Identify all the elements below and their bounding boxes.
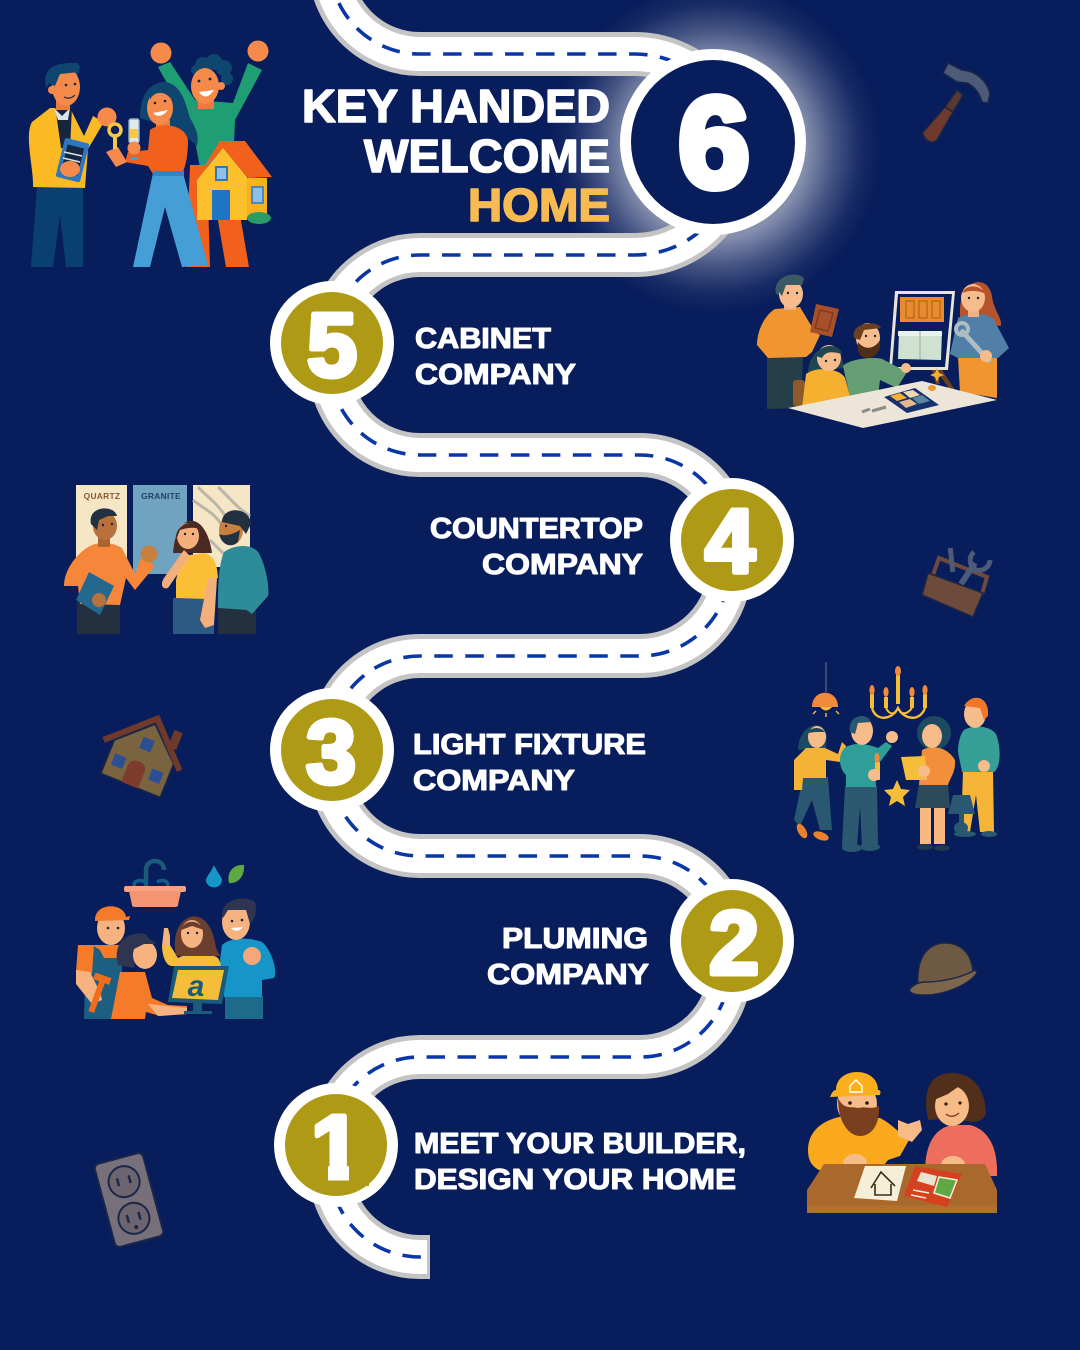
design table with swatches bbox=[788, 381, 997, 428]
step 3 label bbox=[413, 729, 646, 797]
bearded man in green bbox=[843, 323, 911, 397]
man holding door sample bbox=[757, 275, 839, 409]
woman with wrench bbox=[950, 282, 1009, 398]
presentation board bbox=[889, 291, 955, 390]
agent in yellow blazer with keys bbox=[29, 63, 121, 267]
title: key handed welcome home: KEY HANDED bbox=[302, 80, 610, 132]
illustration: keys handed to happy family bbox=[29, 40, 272, 267]
wooden table bbox=[807, 1164, 997, 1213]
step 4 label: COMPANY bbox=[482, 549, 643, 581]
man in blue bbox=[220, 899, 275, 1019]
person with yellow trousers bbox=[958, 698, 1000, 837]
icon: wall outlet bbox=[94, 1152, 164, 1248]
new house bbox=[197, 141, 272, 224]
material samples bbox=[76, 485, 250, 574]
step 3 badge: 3 bbox=[306, 703, 356, 803]
illustration: plumbing company team bbox=[76, 861, 275, 1019]
material samples: QUARTZ bbox=[84, 491, 120, 501]
woman in pink bbox=[925, 1073, 997, 1176]
step 1 badge: 1 bbox=[311, 1098, 361, 1198]
computer monitor bbox=[168, 966, 229, 1014]
step 3 label: LIGHT FIXTURE bbox=[413, 729, 646, 761]
brochure bbox=[904, 1166, 962, 1207]
chandelier bbox=[869, 666, 928, 718]
salesperson in orange bbox=[64, 508, 158, 634]
person in yellow bbox=[794, 725, 846, 842]
winding road bbox=[330, 0, 736, 1257]
step 5 label: CABINET bbox=[415, 323, 551, 355]
illustration: countertop selection bbox=[64, 485, 269, 634]
builder in hard hat bbox=[808, 1072, 922, 1174]
person in orange with tablet bbox=[901, 716, 955, 851]
step 2 label bbox=[487, 923, 649, 991]
step 2 label: PLUMING bbox=[502, 923, 648, 955]
step 5 label bbox=[415, 323, 576, 391]
illustration: cabinet company team bbox=[757, 275, 1009, 428]
icon: toolbox bbox=[922, 548, 990, 617]
step 1 badge bbox=[274, 1083, 398, 1207]
step 2 badge: 2 bbox=[709, 894, 759, 994]
title: key handed welcome home: HOME bbox=[468, 179, 610, 231]
woman in yellow pointing bbox=[162, 916, 222, 966]
step 2 badge bbox=[670, 879, 794, 1003]
pendant lamp bbox=[812, 662, 839, 717]
man in teal bbox=[218, 510, 269, 634]
table lamp bbox=[948, 795, 976, 837]
woman in orange at computer bbox=[111, 933, 187, 1019]
step 4 label: COUNTERTOP bbox=[430, 513, 643, 545]
step 2 label: COMPANY bbox=[487, 959, 649, 991]
plumber bbox=[76, 906, 130, 1019]
house sketch paper bbox=[854, 1166, 906, 1201]
water drop bbox=[206, 865, 222, 888]
woman in orange with jeans bbox=[106, 82, 208, 267]
leaf bbox=[228, 865, 244, 883]
sink and faucet bbox=[124, 861, 186, 907]
illustration: lighting company team bbox=[794, 662, 1000, 852]
step 1 label: DESIGN YOUR HOME bbox=[414, 1164, 736, 1196]
step 3 badge bbox=[270, 688, 394, 812]
step 5 badge: 5 bbox=[307, 296, 357, 396]
title: key handed welcome home: WELCOME bbox=[364, 130, 610, 182]
step 5 label: COMPANY bbox=[415, 359, 576, 391]
person in teal with candle bbox=[840, 716, 898, 852]
material samples: GRANITE bbox=[141, 491, 181, 501]
icon: hammer bbox=[923, 63, 990, 142]
step 4 label bbox=[430, 513, 643, 581]
step 1 label bbox=[414, 1128, 746, 1196]
step 1 label: MEET YOUR BUILDER, bbox=[414, 1128, 746, 1160]
step 3 label: COMPANY bbox=[413, 765, 575, 797]
man in green cheering bbox=[150, 40, 268, 267]
seated woman bbox=[793, 345, 850, 408]
star bbox=[884, 780, 910, 806]
icon: small house bbox=[92, 703, 195, 800]
illustration: meet your builder bbox=[807, 1072, 997, 1213]
step 6 badge bbox=[620, 49, 806, 235]
icon: hard hat bbox=[910, 943, 977, 995]
computer monitor: a bbox=[188, 970, 204, 1003]
step 6 badge: 6 bbox=[678, 72, 750, 215]
woman thinking bbox=[162, 521, 218, 634]
glow behind step 6 bbox=[551, 0, 881, 313]
title: key handed welcome home bbox=[302, 80, 610, 231]
step 4 badge bbox=[670, 478, 794, 602]
step 5 badge bbox=[270, 281, 394, 405]
step 4 badge: 4 bbox=[705, 492, 755, 592]
